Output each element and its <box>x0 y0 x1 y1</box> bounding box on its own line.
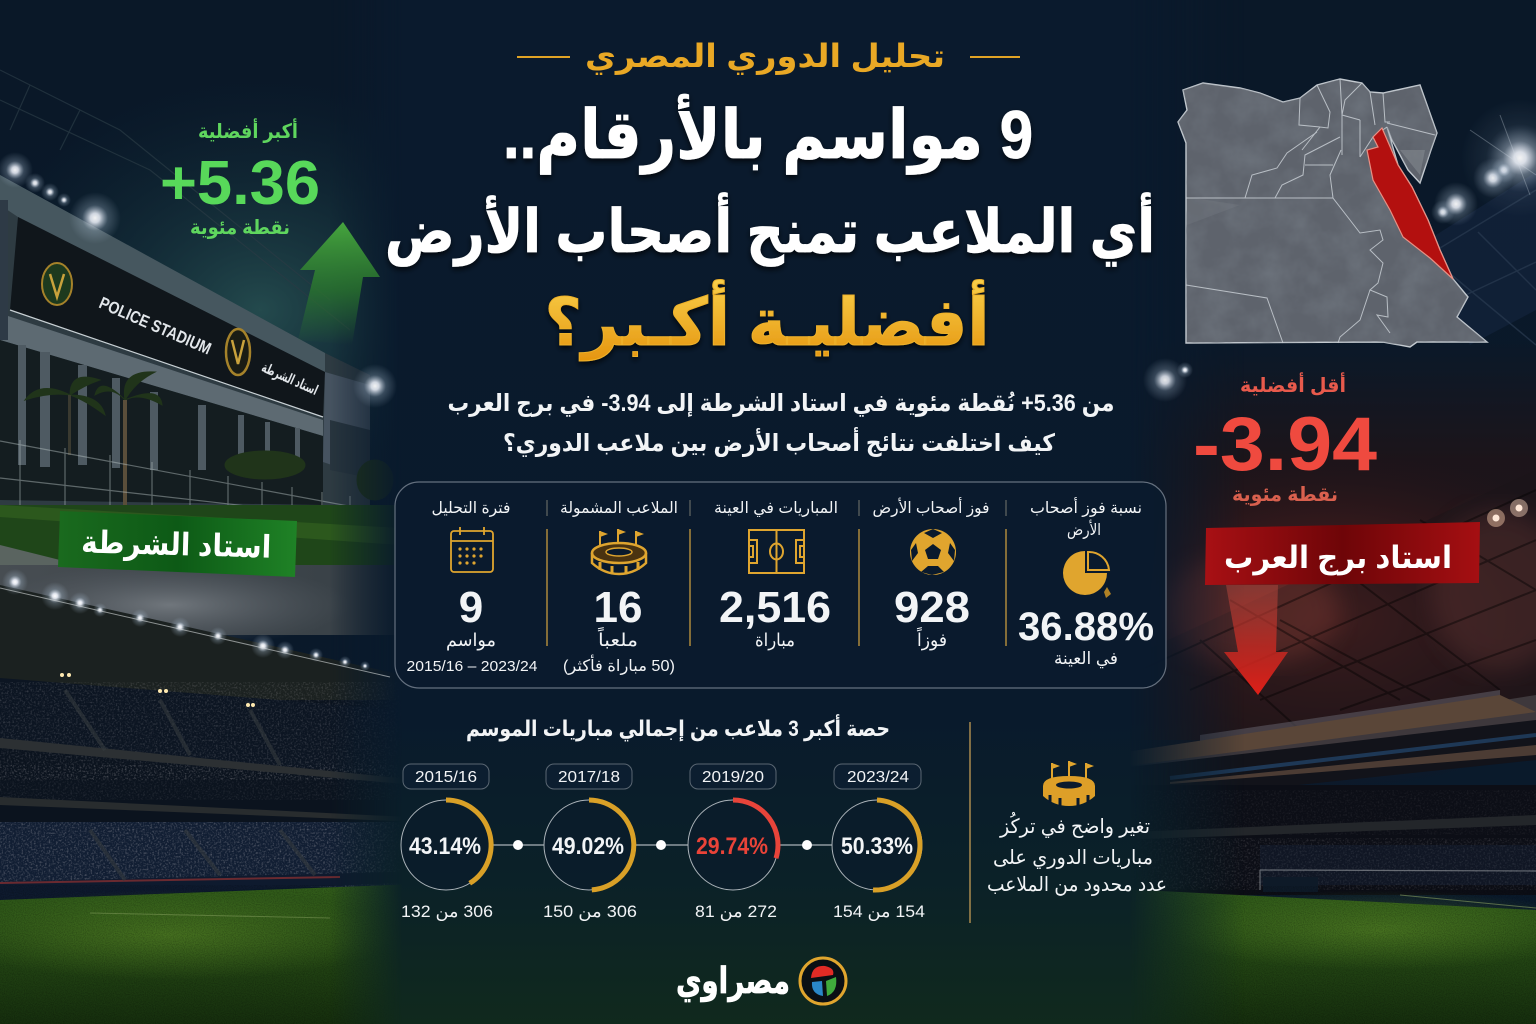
left lower stadium <box>0 563 470 900</box>
panel: key statistics <box>395 482 1166 688</box>
season 2023/24: 2023/24 <box>847 769 909 786</box>
stat: matches in sample: المباريات في العينة <box>714 500 838 518</box>
building sign: Police Stadium: POLICE STADIUM <box>96 293 214 358</box>
icon: pie chart <box>1063 551 1111 598</box>
stat: home win rate: الأرض <box>1067 519 1101 540</box>
side note with divider <box>970 722 1167 923</box>
stat: stadiums included: ملعباً <box>597 627 638 650</box>
subtitle <box>447 390 1114 457</box>
main title: أي الملاعب تمنح أصحاب الأرض <box>385 192 1155 267</box>
side note with divider: تغير واضح في تركُز <box>999 812 1150 839</box>
subtitle: من ⁦+5.36⁩ نُقطة مئوية في استاد الشرطة إلى ⁦-3.94⁩ في برج العرب <box>447 390 1114 417</box>
Red Sea governorate <box>1367 128 1453 279</box>
stat: analysis period: 9 <box>459 583 483 632</box>
season 2015/16 <box>401 764 493 921</box>
building sign: Police Stadium: استاد الشرطة <box>259 359 321 399</box>
palm trees <box>25 372 393 505</box>
stat: home win rate: نسبة فوز أصحاب <box>1030 497 1142 518</box>
stat: stadiums included: (50 مباراة فأكثر) <box>563 654 675 676</box>
floodlights <box>0 98 1536 677</box>
season 2017/18: 49.02% <box>552 833 624 860</box>
season 2019/20: 2019/20 <box>702 769 764 786</box>
green stadium banner <box>58 511 297 577</box>
red callout: lowest advantage: نقطة مئوية <box>1232 484 1338 506</box>
season 2019/20: 272 من 81 <box>695 902 777 921</box>
left building <box>0 70 470 585</box>
pitch <box>0 882 1536 1024</box>
icon: football <box>910 529 956 575</box>
side note with divider: مباريات الدوري على <box>993 847 1153 870</box>
season 2017/18 <box>543 764 637 921</box>
icon: stadium <box>592 529 646 574</box>
stat: home wins: 928 <box>894 583 970 632</box>
stat: stadiums included <box>560 500 678 676</box>
stat: matches in sample: مباراة <box>755 630 795 650</box>
stat: matches in sample <box>714 500 838 650</box>
stat: analysis period: مواسم <box>446 630 496 651</box>
side note with divider: عدد محدود من الملاعب <box>987 874 1167 896</box>
stat: stadiums included: 16 <box>594 583 642 632</box>
season 2015/16: 43.14% <box>409 833 481 860</box>
season 2023/24: 154 من 154 <box>833 902 925 921</box>
green callout: biggest advantage: أكبر أفضلية <box>198 117 298 143</box>
connectors between seasons <box>491 840 832 850</box>
stat: analysis period: فترة التحليل <box>432 500 510 518</box>
icon: calendar <box>451 527 493 572</box>
stat: home win rate: 36.88% <box>1018 605 1154 649</box>
season 2023/24: 50.33% <box>841 833 913 860</box>
season 2019/20: 29.74% <box>696 833 768 860</box>
map of Egypt highlighting Red Sea <box>1178 79 1488 349</box>
stat: analysis period: 2015/16 – 2023/24 <box>406 659 538 675</box>
season 2023/24 <box>832 764 925 921</box>
stat: analysis period <box>406 500 538 675</box>
icon: pitch <box>749 530 804 573</box>
red stadium banner <box>1205 522 1480 585</box>
season 2015/16: 306 من 132 <box>401 902 493 921</box>
red callout: lowest advantage <box>1193 371 1377 506</box>
stat: home wins: فوز أصحاب الأرض <box>872 497 990 518</box>
red callout: lowest advantage: أقل أفضلية <box>1240 371 1346 397</box>
stat: home wins: فوزاً <box>916 627 947 651</box>
season 2015/16: 2015/16 <box>415 769 477 786</box>
icon: stadium <box>1043 761 1095 806</box>
green up arrow <box>298 222 380 345</box>
season 2019/20 <box>688 764 778 921</box>
heading: top three stadiums share: حصة أكبر 3 ملاعب من إجمالي مباريات الموسم <box>466 713 890 742</box>
main title: 9 مواسم بالأرقام.. <box>503 93 1033 175</box>
central dark overlay <box>336 197 1233 1024</box>
right lower stadium <box>1060 690 1536 895</box>
left sky glow <box>0 80 540 540</box>
main title: أفضليـة أكـبر؟ <box>544 279 990 361</box>
subtitle: كيف اختلفت نتائج أصحاب الأرض بين ملاعب الدوري؟ <box>503 427 1055 457</box>
stat: stadiums included: الملاعب المشمولة <box>560 500 678 518</box>
red stadium banner: استاد برج العرب <box>1224 540 1452 576</box>
season 2017/18: 306 من 150 <box>543 902 637 921</box>
green callout: biggest advantage: نقطة مئوية <box>190 217 290 239</box>
stat: home win rate: في العينة <box>1054 649 1118 669</box>
kicker heading: تحليل الدوري المصري <box>585 38 945 75</box>
right stadium roof <box>1040 172 1536 790</box>
logo: Masrawy: مصراوي <box>676 960 790 1002</box>
main title <box>385 93 1155 361</box>
green callout: biggest advantage: +5.36 <box>160 149 320 218</box>
red down arrow <box>1224 585 1288 695</box>
stat: home wins <box>872 497 990 651</box>
red callout: lowest advantage: -3.94 <box>1193 402 1377 487</box>
stat: matches in sample: 2,516 <box>719 583 831 632</box>
building sign: Police Stadium <box>42 263 321 399</box>
green stadium banner: استاد الشرطة <box>81 524 272 566</box>
fence <box>0 440 370 528</box>
green callout: biggest advantage <box>160 117 320 239</box>
season 2017/18: 2017/18 <box>558 769 620 786</box>
stat: home win rate <box>1018 497 1154 669</box>
